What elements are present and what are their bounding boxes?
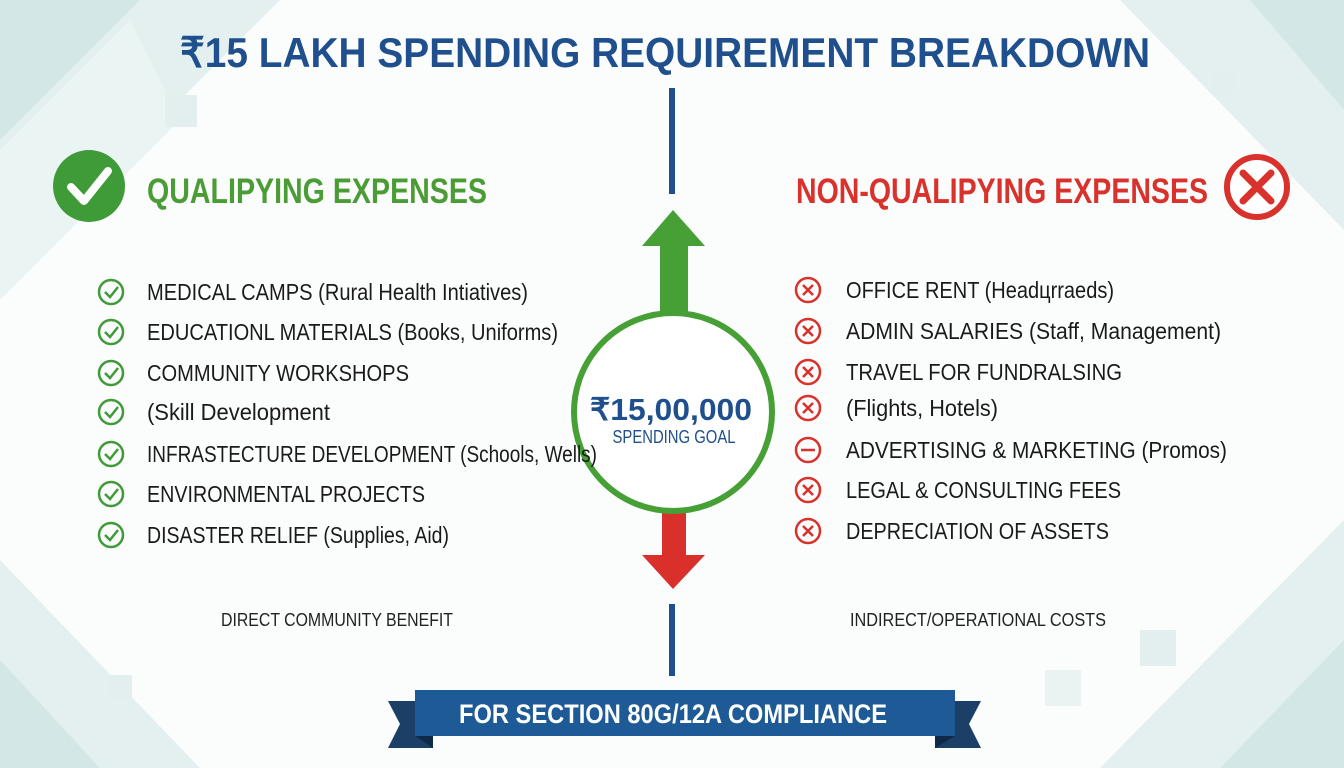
header: non-qualifying xyxy=(796,157,1287,217)
list: qualifying items: (Skill Development xyxy=(147,399,331,425)
center circle: spending goal: ₹15,00,000 xyxy=(590,392,752,427)
bottom vertical line xyxy=(669,604,675,676)
header: qualifying: QUALIPYING EXPENSES xyxy=(147,172,487,211)
title: ₹15 LAKH SPENDING REQUIREMENT BREAKDOWN xyxy=(180,29,1150,76)
caption: direct community benefit: DIRECT COMMUNITY BENEFIT xyxy=(221,610,453,630)
list: non-qualifying items: (Flights, Hotels) xyxy=(846,395,998,421)
caption: indirect/operational costs: INDIRECT/OPERATIONAL COSTS xyxy=(850,610,1106,630)
list: non-qualifying items: ADMIN SALARIES (Staff, Management) xyxy=(846,318,1221,344)
header: non-qualifying: NON-QUALIPYING EXPENSES xyxy=(796,172,1208,211)
list: non-qualifying items: LEGAL & CONSULTING FEES xyxy=(846,477,1121,503)
list: non-qualifying items: DEPRECIATION OF ASSETS xyxy=(846,518,1109,544)
list: qualifying items: ENVIRONMENTAL PROJECTS xyxy=(147,481,425,507)
list: qualifying items: INFRASTECTURE DEVELOPMENT (Schools, Wells) xyxy=(147,441,597,467)
arrow: down red xyxy=(642,508,705,589)
list: qualifying items: EDUCATIONL MATERIALS (Books, Uniforms) xyxy=(147,319,558,345)
center circle: spending goal xyxy=(574,313,772,511)
arrow: up green xyxy=(642,210,705,315)
top vertical line xyxy=(669,88,675,194)
header: qualifying xyxy=(53,150,487,222)
list: non-qualifying items xyxy=(796,277,1227,544)
list: qualifying items: MEDICAL CAMPS (Rural Health Intiatives) xyxy=(147,279,528,305)
list: non-qualifying items: OFFICE RENT (Headцrraeds) xyxy=(846,277,1114,303)
banner: compliance: FOR SECTION 80G/12A COMPLIANCE xyxy=(459,699,887,729)
list: non-qualifying items: TRAVEL FOR FUNDRALSING xyxy=(846,359,1122,385)
list: qualifying items xyxy=(99,279,597,548)
list: qualifying items: COMMUNITY WORKSHOPS xyxy=(147,360,409,386)
list: qualifying items: DISASTER RELIEF (Supplies, Aid) xyxy=(147,522,449,548)
list: non-qualifying items: ADVERTISING & MARKETING (Promos) xyxy=(846,437,1227,463)
center circle: spending goal: SPENDING GOAL xyxy=(612,427,736,447)
banner: compliance xyxy=(388,690,981,748)
